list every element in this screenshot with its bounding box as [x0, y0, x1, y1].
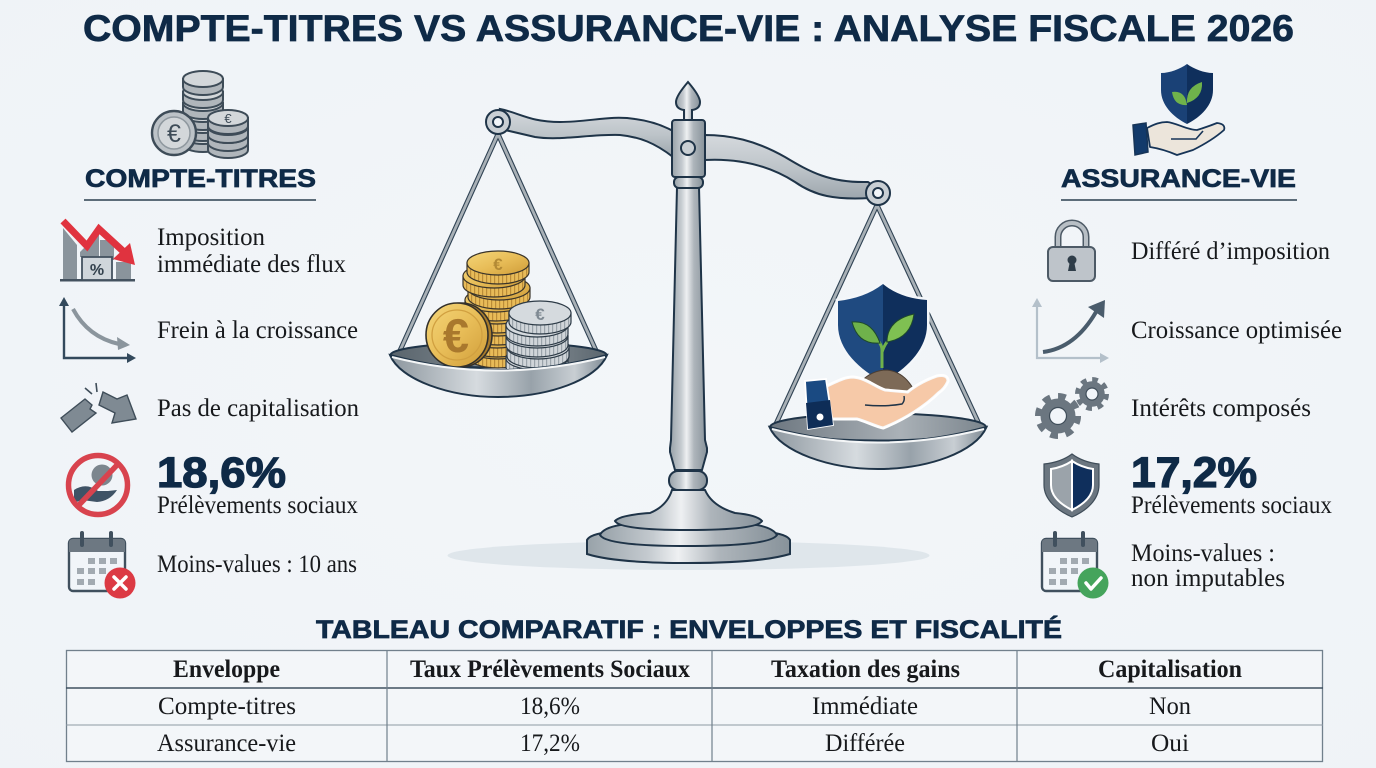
table row: assurance-vie — [157, 730, 1189, 757]
table header row: Taxation des gains — [771, 656, 960, 683]
gold coin stack: € — [493, 255, 503, 274]
soil mound — [858, 370, 915, 395]
heading: assurance-vie: ASSURANCE-VIE — [1061, 165, 1296, 193]
left pan chains — [398, 134, 598, 355]
table row: compte-titres: Non — [1149, 693, 1191, 720]
stat: 17,2%: 17,2% — [1131, 449, 1257, 497]
beam — [486, 109, 890, 205]
heading underline — [1061, 199, 1297, 201]
text: moins-values non imputables: Moins-values : — [1131, 540, 1275, 567]
icon: falling chart with percent: % — [90, 262, 104, 279]
stat: 18,6%: 18,6% — [157, 449, 286, 497]
text: imposition immediate — [157, 224, 346, 278]
stat: 18,6%: Prélèvements sociaux — [157, 492, 358, 519]
gold coin stack — [463, 251, 530, 368]
shield with plant — [838, 284, 927, 382]
icon: growth curve — [1032, 298, 1109, 363]
stat: 17,2%: Prélèvements sociaux — [1131, 492, 1332, 519]
title: COMPTE-TITRES VS ASSURANCE-VIE : ANALYSE FISCALE 2026 — [83, 8, 1294, 49]
table row: assurance-vie: 17,2% — [520, 730, 580, 757]
text: interets composes: Intérêts composés — [1131, 395, 1311, 422]
ground shadow — [448, 541, 930, 570]
table grid — [66, 650, 1323, 762]
icon: half shield — [1044, 454, 1099, 517]
heading: compte-titres: COMPTE-TITRES — [85, 165, 316, 193]
table heading: TABLEAU COMPARATIF : ENVELOPPES ET FISCALITÉ — [316, 615, 1062, 644]
icon: shield and hand — [1133, 64, 1224, 155]
left pan bowl — [390, 355, 607, 397]
table header row: Taux Prélèvements Sociaux — [410, 656, 690, 683]
table header row: Enveloppe — [173, 656, 280, 683]
icon: broken arrow — [61, 383, 136, 432]
column — [670, 187, 707, 470]
stat: 18,6% — [157, 449, 358, 519]
right pan — [770, 414, 986, 469]
text: moins-values 10 ans: Moins-values : 10 ans — [157, 551, 357, 578]
table row: assurance-vie: Oui — [1151, 730, 1189, 757]
silver coin stack: € — [535, 305, 545, 324]
stat: 17,2% — [1131, 449, 1332, 519]
table row: assurance-vie: Assurance-vie — [157, 730, 296, 757]
text: imposition immediate: immédiate des flux — [157, 251, 346, 278]
text: moins-values non imputables: non imputables — [1131, 565, 1285, 592]
icon: prohibited hand — [68, 456, 128, 514]
text: croissance optimisee: Croissance optimisée — [1131, 317, 1342, 344]
pivot and finial — [672, 82, 705, 188]
icon: padlock — [1048, 223, 1095, 281]
table row: assurance-vie: Différée — [825, 730, 905, 757]
comparison table — [66, 650, 1323, 762]
icon: calendar with red cross — [69, 533, 136, 598]
left pan back — [390, 342, 606, 368]
icon: coin stacks: € — [167, 120, 181, 148]
icon: calendar with green check — [1042, 533, 1108, 598]
icon: declining curve — [59, 297, 136, 363]
gold euro coin: € — [443, 309, 469, 362]
table row: compte-titres: 18,6% — [520, 693, 580, 720]
illustration: balance scale — [390, 82, 986, 570]
icon: coin stacks — [152, 71, 248, 158]
panel: compte-titres — [59, 71, 359, 598]
text: differe: Différé d’imposition — [1131, 238, 1330, 265]
table header row: Capitalisation — [1098, 656, 1242, 683]
heading underline — [84, 199, 316, 201]
icon: coin stacks: € — [224, 111, 232, 126]
text: pas de capitalisation: Pas de capitalisation — [157, 395, 359, 422]
text: moins-values non imputables — [1131, 540, 1285, 592]
right pan chains — [775, 205, 980, 426]
gold euro coin — [426, 303, 492, 367]
text: frein: Frein à la croissance — [157, 317, 358, 344]
table row: compte-titres — [158, 693, 1191, 720]
panel: assurance-vie — [1032, 64, 1342, 598]
table row: compte-titres: Compte-titres — [158, 693, 296, 720]
silver coin stack — [506, 301, 571, 379]
icon: falling chart with percent — [60, 221, 135, 282]
table row: compte-titres: Immédiate — [812, 693, 918, 720]
hand holding plant — [805, 376, 947, 429]
base — [587, 471, 790, 563]
table header row — [173, 656, 1242, 683]
text: imposition immediate: Imposition — [157, 224, 265, 251]
icon: gears — [1038, 380, 1106, 436]
